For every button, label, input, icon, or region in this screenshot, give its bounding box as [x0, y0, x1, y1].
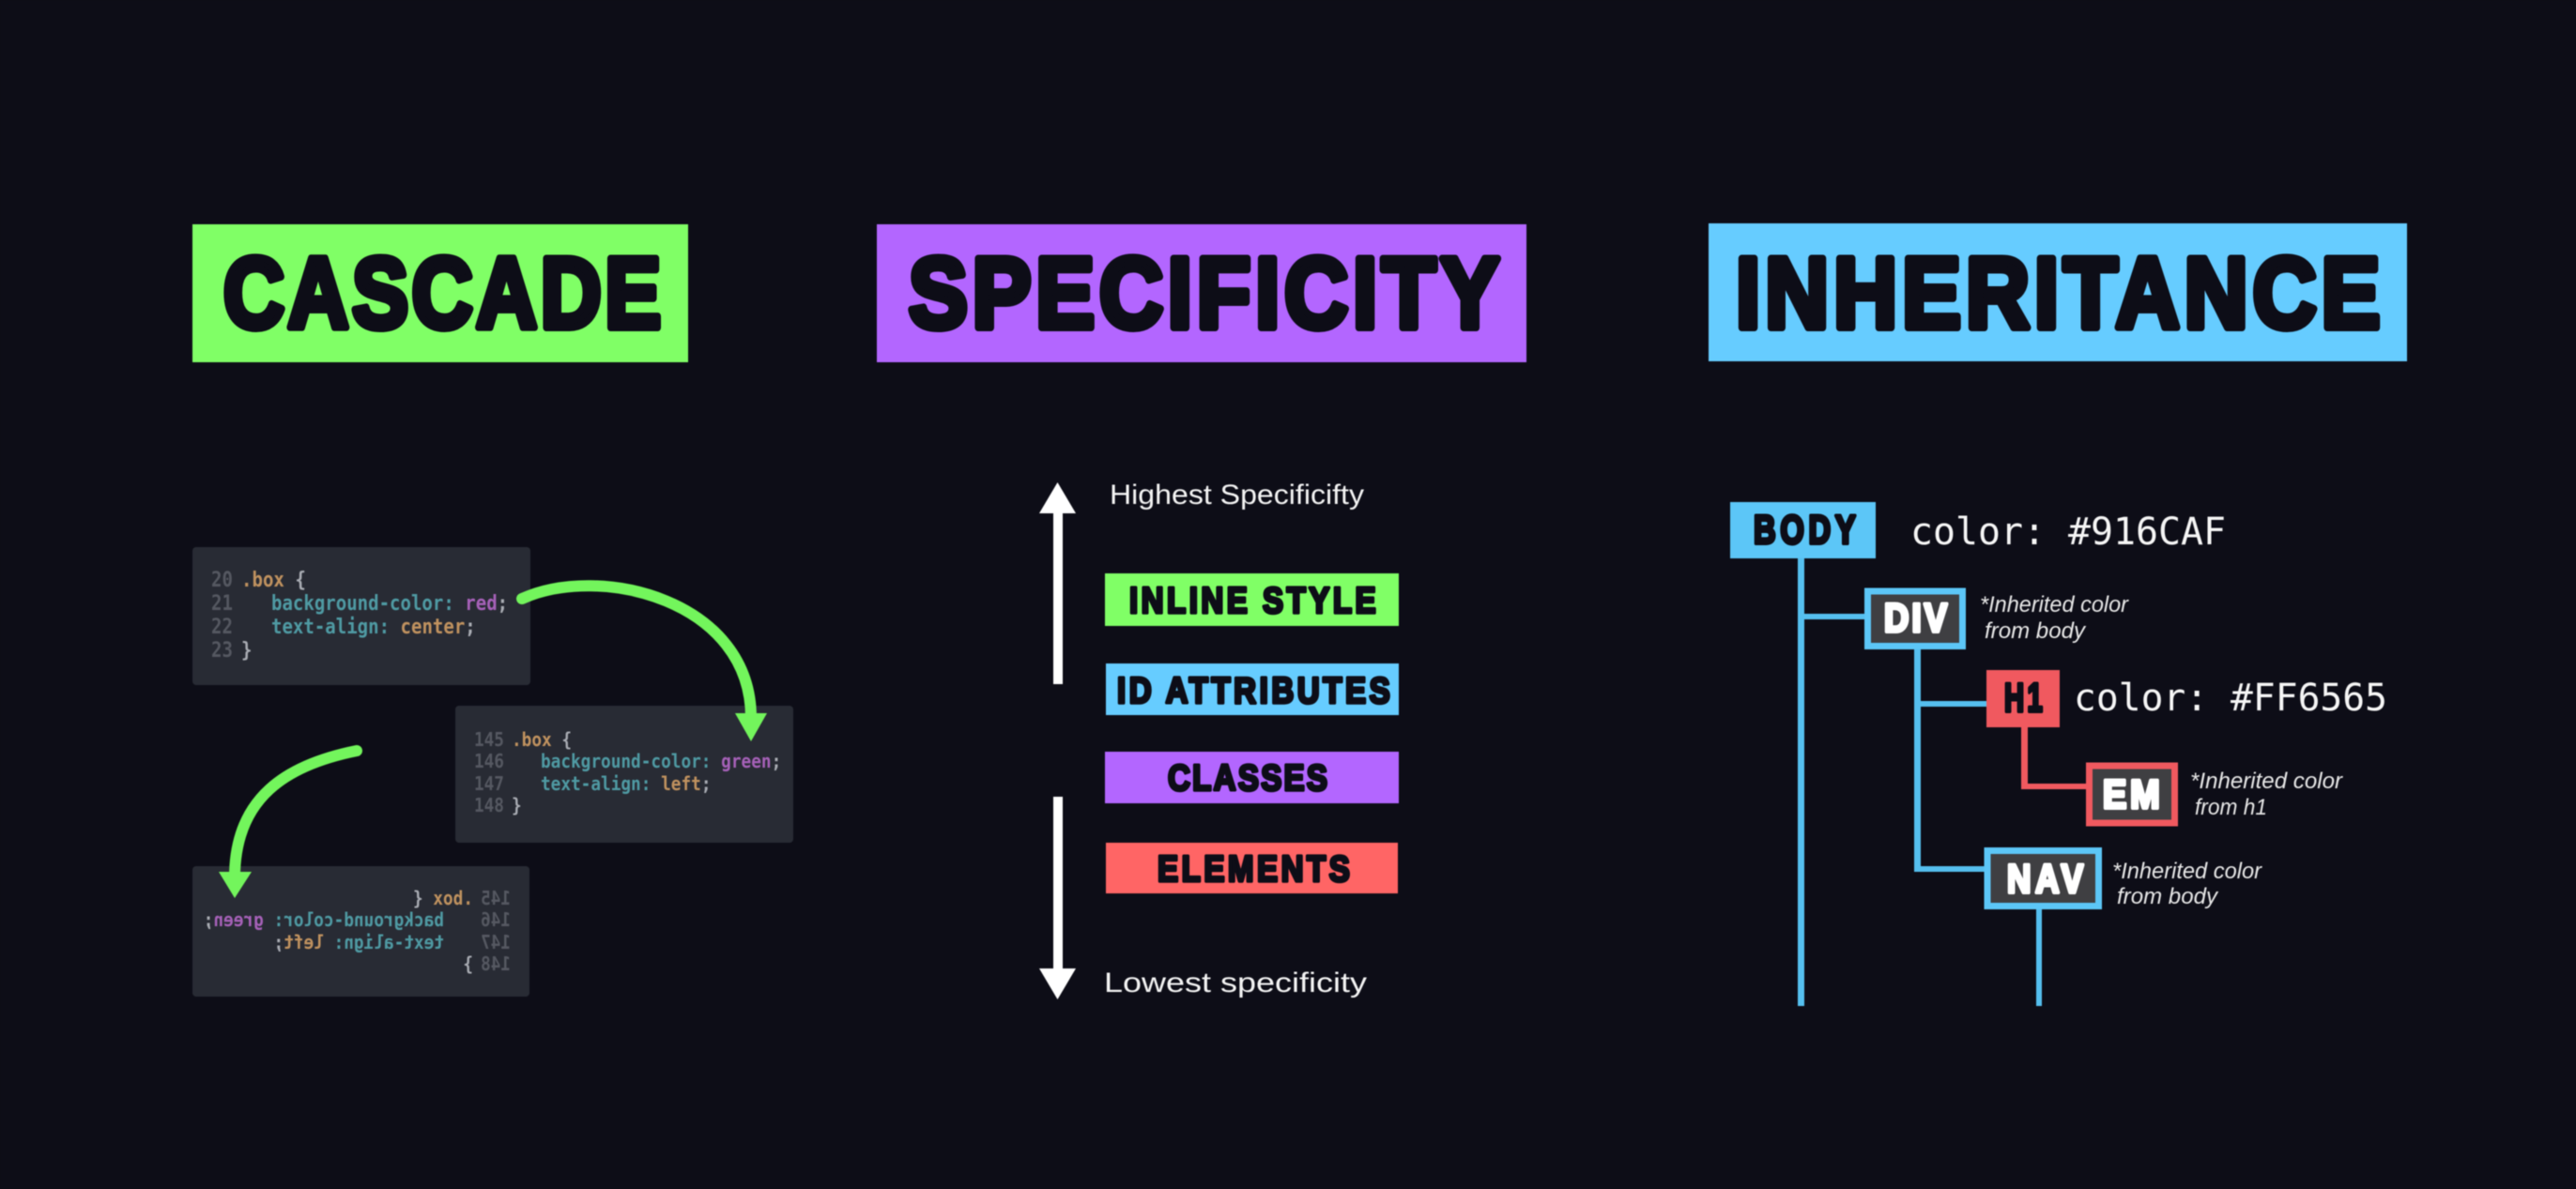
code: h1 color: color: #FF6565	[2074, 677, 2387, 720]
code block: first box rule: .box {	[241, 568, 306, 591]
code block: mirrored box rule: }	[463, 953, 473, 975]
bar: elements	[1106, 843, 1398, 893]
code block: second box rule	[455, 706, 793, 843]
arrow: down to lowest specificity	[1039, 797, 1076, 999]
code block: second box rule: 146	[474, 750, 504, 772]
heading: inheritance: INHERITANCE	[1736, 237, 2380, 349]
code block: mirrored box rule: 147	[481, 931, 511, 953]
node: body	[1730, 502, 1876, 558]
code block: mirrored box rule: 145	[481, 887, 511, 909]
code block: second box rule: text-align: left;	[541, 772, 712, 795]
arrow: second rule to mirrored rule	[219, 751, 357, 898]
code block: mirrored box rule: background-color: green;	[204, 908, 444, 931]
note: nav inherited color	[2112, 859, 2262, 909]
code block: first box rule: 23	[211, 638, 233, 662]
code block: mirrored box rule: .box {	[413, 887, 473, 909]
note: div inherited color: from body	[1985, 618, 2087, 644]
code block: second box rule: .box {	[512, 728, 572, 751]
code: body color: color: #916CAF	[1910, 511, 2226, 554]
note: nav inherited color: from body	[2117, 884, 2219, 909]
node: nav	[1987, 850, 2099, 907]
code block: first box rule: text-align: center;	[271, 615, 476, 638]
panel: inheritance tree	[1730, 502, 2387, 1006]
code block: mirrored box rule	[192, 866, 529, 997]
code block: first box rule	[192, 547, 530, 685]
node: h1: H1	[2004, 675, 2043, 720]
code block: mirrored box rule: text-align: left;	[273, 931, 444, 953]
node: h1	[1986, 670, 2060, 727]
panel: specificity ranking	[1039, 480, 1399, 999]
note: em inherited color: *Inherited color	[2190, 769, 2343, 794]
code block: second box rule: 147	[474, 772, 504, 795]
code block: second box rule: 145	[474, 728, 504, 751]
code block: first box rule: 21	[211, 591, 233, 615]
note: div inherited color	[1980, 592, 2129, 644]
bar: inline style: INLINE STYLE	[1129, 579, 1376, 621]
heading: specificity: SPECIFICITY	[909, 237, 1499, 349]
node: em: EM	[2103, 771, 2160, 817]
note: div inherited color: *Inherited color	[1980, 592, 2129, 617]
arrow: up to highest specificity	[1039, 482, 1076, 684]
node: nav: NAV	[2007, 857, 2083, 902]
label: highest specificity: Highest Specificifty	[1110, 480, 1364, 511]
bar: classes: CLASSES	[1168, 756, 1327, 799]
code block: second box rule: 148	[474, 794, 504, 816]
node: div: DIV	[1884, 596, 1948, 641]
node: div	[1868, 591, 1962, 646]
note: em inherited color	[2190, 769, 2343, 820]
note: nav inherited color: *Inherited color	[2112, 859, 2262, 884]
code block: mirrored box rule: 146	[481, 908, 511, 931]
code block: first box rule: 20	[211, 568, 233, 591]
bar: inline style	[1105, 573, 1399, 626]
arrow: first rule to second rule	[522, 586, 767, 741]
code block: second box rule: background-color: green;	[541, 750, 781, 772]
code block: second box rule: }	[512, 794, 522, 816]
node: em	[2090, 766, 2174, 823]
label: lowest specificity: Lowest specificity	[1104, 968, 1367, 998]
panel: cascade code examples	[192, 547, 793, 997]
connectors: tree lines	[1798, 554, 2089, 1006]
bar: id attributes: ID ATTRIBUTES	[1117, 669, 1390, 711]
code block: first box rule: }	[241, 638, 253, 662]
note: em inherited color: from h1	[2195, 795, 2267, 820]
heading: cascade: CASCADE	[223, 237, 661, 349]
code block: mirrored box rule: 148	[481, 953, 511, 975]
node: body: BODY	[1754, 508, 1856, 553]
code block: first box rule: background-color: red;	[271, 591, 508, 615]
code block: first box rule: 22	[211, 615, 233, 638]
bar: classes	[1105, 752, 1399, 803]
bar: elements: ELEMENTS	[1158, 847, 1350, 890]
